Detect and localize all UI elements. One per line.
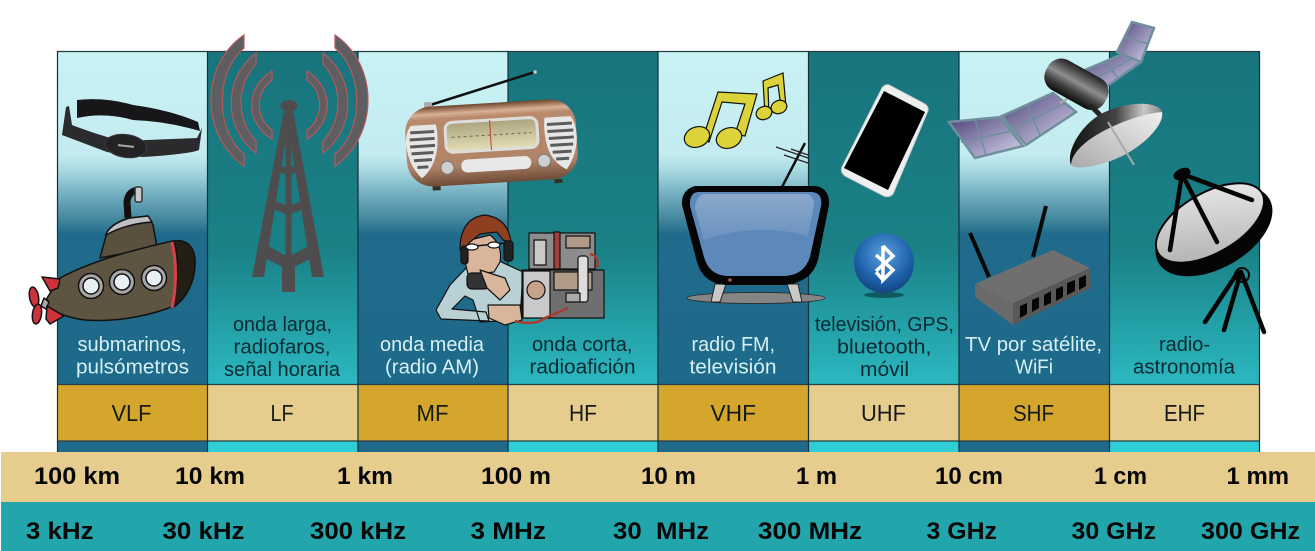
icon: satellite: [949, 22, 1162, 167]
uses text: VLF: [76, 334, 189, 378]
frequency scale: 30 GHz: [1072, 518, 1156, 545]
band labels row: UHF: [861, 400, 906, 426]
wavelength scale: 100 m: [481, 463, 551, 490]
icon: bluetooth: [854, 233, 914, 298]
uses text: MF: onda media: [380, 334, 485, 356]
icon: radio tower with waves: [211, 35, 368, 292]
uses text: SHF: WiFi: [1015, 356, 1053, 378]
uses text: SHF: TV por satélite,: [965, 334, 1102, 356]
uses text: UHF: bluetooth,: [837, 336, 932, 358]
frequency scale: 300 MHz: [758, 518, 862, 545]
frequency scale: 300 GHz: [1201, 518, 1300, 545]
uses text: UHF: [815, 314, 954, 381]
uses text: SHF: [965, 334, 1102, 378]
band labels row: [57, 51, 1260, 452]
icon: retro radio: [404, 70, 580, 192]
band labels row: MF: [416, 400, 448, 426]
frequency scale: 30 kHz: [162, 518, 244, 545]
uses text: VHF: radio FM,: [692, 334, 775, 356]
uses text: UHF: móvil: [860, 359, 909, 381]
wavelength scale: 1 cm: [1094, 463, 1147, 490]
uses text: EHF: astronomía: [1133, 356, 1236, 378]
panel: spectrum columns: [57, 51, 1260, 452]
wavelength scale: 10 km: [175, 463, 245, 490]
uses text: EHF: radio-: [1159, 334, 1210, 356]
wavelength scale: 10 cm: [935, 463, 1003, 490]
uses text: HF: radioafición: [530, 356, 636, 378]
frequency scale: 30 MHz: [613, 518, 709, 545]
frequency scale: 3 GHz: [926, 518, 997, 545]
uses text: HF: [530, 334, 636, 378]
icon: heart rate chest strap: [62, 99, 202, 160]
frequency scale: 300 kHz: [310, 518, 406, 545]
uses text: EHF: [1133, 334, 1236, 378]
frequency scale: 3 kHz: [26, 518, 94, 545]
icon: television: [682, 143, 829, 304]
wavelength scale: [1, 452, 1315, 502]
uses text: VLF: pulsómetros: [76, 356, 189, 378]
frequency scale: 3 MHz: [470, 518, 546, 545]
wavelength scale: 1 m: [796, 463, 837, 490]
uses text: HF: onda corta,: [532, 334, 632, 356]
icon: submarine: [28, 187, 195, 325]
icon: radio amateur operator: [436, 215, 604, 325]
uses text: VLF: submarinos,: [78, 334, 186, 356]
wavelength scale: 100 km: [34, 463, 120, 490]
uses text: LF: [224, 314, 341, 381]
wavelength scale: 10 m: [641, 463, 696, 490]
uses text: LF: señal horaria: [224, 359, 341, 381]
band labels row: VHF: [710, 400, 756, 426]
uses text: MF: (radio AM): [385, 356, 479, 378]
band labels row: SHF: [1013, 400, 1054, 426]
icon: music notes: [681, 73, 789, 152]
uses text: VHF: [690, 334, 776, 378]
band labels row: HF: [569, 400, 597, 426]
uses text: VHF: televisión: [690, 356, 776, 378]
band labels row: EHF: [1164, 400, 1205, 426]
band labels row: VLF: [112, 400, 152, 426]
band labels row: LF: [270, 400, 294, 426]
frequency scale: [1, 502, 1315, 551]
uses text: LF: radiofaros,: [234, 336, 330, 358]
icon: smartphone: [841, 85, 928, 197]
uses text: UHF: televisión, GPS,: [815, 314, 954, 336]
icon: parabolic dish: [1140, 165, 1288, 332]
wavelength scale: 1 mm: [1226, 463, 1289, 490]
uses text: MF: [380, 334, 485, 378]
icon: wifi router: [970, 206, 1091, 325]
wavelength scale: 1 km: [337, 463, 393, 490]
uses text: LF: onda larga,: [233, 314, 332, 336]
